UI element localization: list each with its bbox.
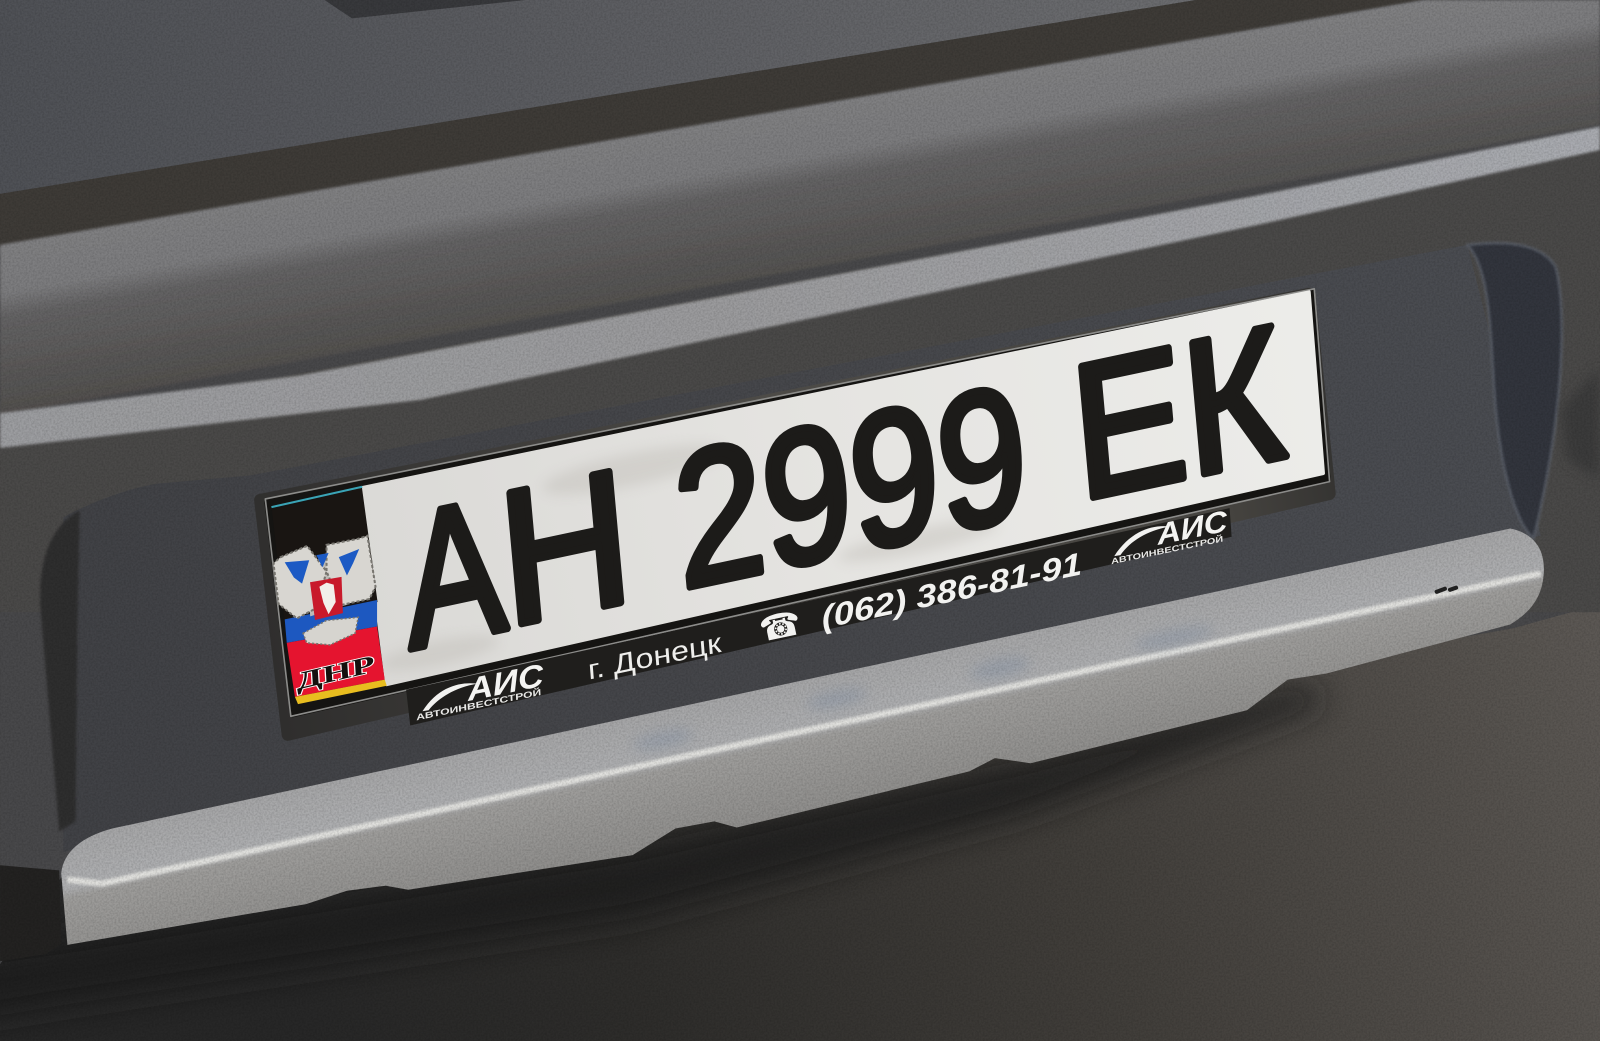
registration digits 2999: 2999 bbox=[666, 344, 1035, 630]
white bird in shield bbox=[319, 583, 336, 614]
silver skid plate bbox=[61, 529, 1544, 945]
telephone icon: ☎ bbox=[756, 603, 805, 650]
left AIS logo bbox=[416, 656, 546, 722]
black flag band bbox=[272, 488, 378, 622]
right AIS logo: АИС bbox=[1154, 505, 1229, 552]
blue wing patches bbox=[285, 560, 309, 584]
flag top teal edge bbox=[271, 487, 362, 507]
shadow under bumper bbox=[0, 684, 1327, 1041]
blue smudges bbox=[632, 621, 1215, 754]
left bottom black trim bbox=[0, 865, 61, 961]
yellow flag band bbox=[295, 680, 387, 704]
registration text АН bbox=[395, 429, 639, 690]
city name: г. Донецк bbox=[587, 627, 723, 686]
eagle body bbox=[306, 555, 349, 616]
strip background bbox=[406, 508, 1232, 725]
DNR label: ДНР bbox=[296, 651, 375, 696]
red shield bbox=[310, 577, 343, 620]
left AIS logo: АИС bbox=[464, 656, 546, 708]
dark bumper face bbox=[0, 133, 1600, 612]
eagle emblem bbox=[273, 536, 376, 645]
right AIS logo: АВТОИНВЕСТСТРОЙ bbox=[1111, 532, 1223, 566]
upper bumper surface bbox=[0, 0, 1600, 415]
phone number: (062) 386-81-91 bbox=[820, 545, 1083, 636]
skid highlight ridge bbox=[67, 573, 1541, 884]
scratch marks bbox=[1437, 588, 1456, 592]
left wing bbox=[273, 546, 327, 618]
plate frame bbox=[260, 294, 1330, 735]
right vent pillar bbox=[1467, 243, 1562, 539]
flag sticker bbox=[271, 487, 387, 704]
tailgate panel bbox=[0, 0, 1196, 194]
right wing bbox=[327, 536, 376, 605]
white plate surface bbox=[361, 292, 1323, 685]
left AIS logo: АВТОИНВЕСТСТРОЙ bbox=[416, 686, 541, 722]
bumper light crease band bbox=[0, 127, 1600, 448]
dirty gap under tailgate bbox=[0, 0, 1423, 247]
bezel light edge bbox=[265, 289, 1330, 716]
recess left shadow bbox=[40, 510, 80, 832]
right AIS logo bbox=[1111, 505, 1229, 566]
registration text ЕК: ЕК bbox=[1064, 285, 1291, 541]
advertising strip bbox=[406, 505, 1232, 725]
licence plate with frame bbox=[260, 285, 1330, 735]
right bumper corner shadow bbox=[1561, 367, 1600, 480]
plate recess bbox=[63, 245, 1541, 852]
red flag band bbox=[287, 627, 385, 697]
blue flag band bbox=[285, 600, 377, 643]
registration text АН: Н bbox=[492, 429, 639, 667]
asphalt road bbox=[0, 571, 1600, 1041]
registration text АН: А bbox=[395, 458, 512, 690]
plate dirt patches bbox=[376, 434, 1001, 678]
tail feathers bbox=[303, 617, 358, 645]
black bezel bbox=[267, 293, 1328, 714]
